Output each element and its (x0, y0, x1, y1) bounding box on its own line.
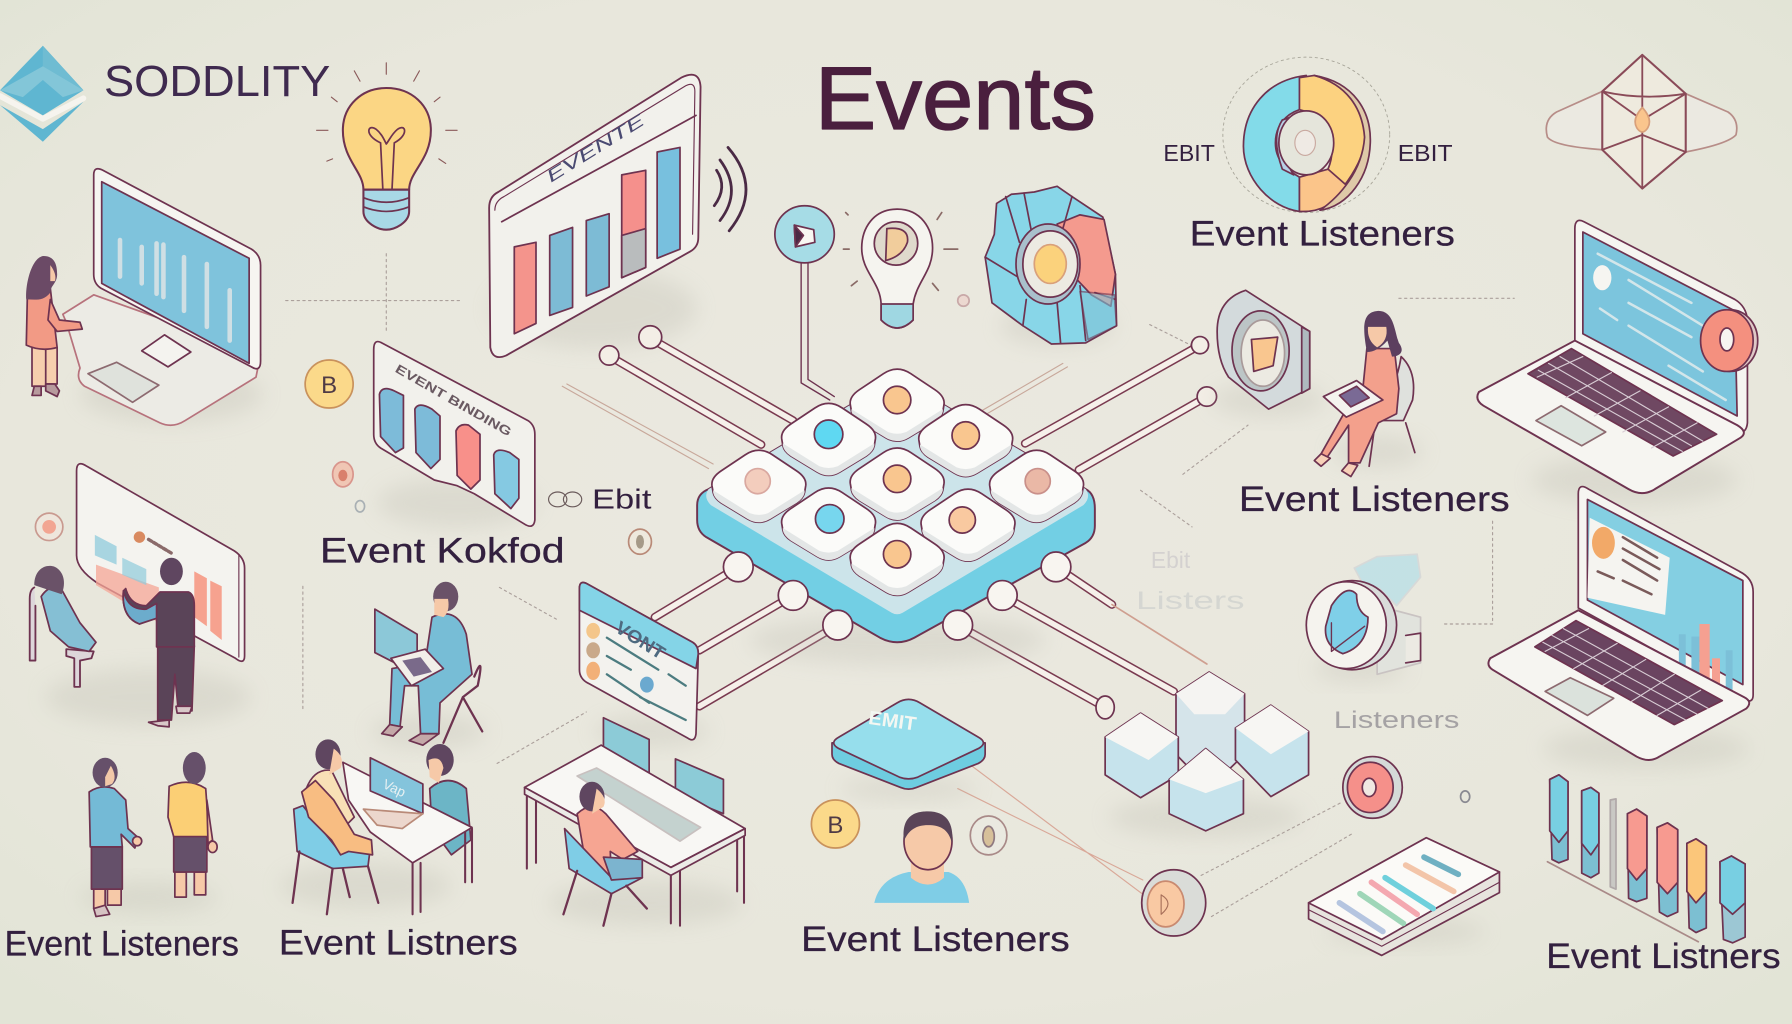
badge: B left (305, 360, 353, 408)
tablet (1323, 381, 1383, 417)
worker (563, 782, 647, 926)
shoes (382, 725, 439, 745)
icon: signal waves (714, 147, 746, 231)
small dot (958, 295, 969, 306)
laptop top right (1477, 220, 1758, 505)
donut chart (1223, 57, 1390, 213)
panel heading: EVENTE (542, 109, 649, 186)
window heading: VONT (612, 616, 669, 663)
label: Listeners: Listeners (1334, 707, 1459, 734)
label: Event Listeners bottom center: Event Listeners (801, 919, 1070, 959)
keyboard (1535, 621, 1722, 725)
small pink token (333, 462, 353, 487)
icon: segmented gear (985, 186, 1117, 346)
label: Event Listeners bottom left: Event Listeners (5, 923, 239, 963)
label: Event Listeners right: Event Listeners (1239, 479, 1510, 519)
keyboard (1528, 349, 1717, 456)
browser window card (579, 582, 709, 747)
panel: binding bar chart (374, 342, 537, 528)
desk with monitors and worker (525, 718, 745, 926)
pointed bar chart (1547, 775, 1745, 943)
screen bars (1679, 624, 1733, 696)
label: Event Listners: Event Listners (279, 922, 518, 962)
window content (586, 623, 654, 693)
ring listener icon (1306, 554, 1421, 682)
emit text: EMIT (867, 707, 918, 736)
cube front (1169, 749, 1243, 831)
panel bars (379, 389, 519, 509)
label: Ebit (549, 484, 652, 515)
trackpad (1536, 406, 1606, 446)
cube left (1105, 713, 1178, 798)
chair (441, 666, 482, 789)
stripes (1339, 857, 1458, 931)
pink ring token (1343, 757, 1402, 818)
chair (1366, 357, 1415, 466)
tiny token (1461, 791, 1470, 802)
tile: upper right (919, 405, 1013, 477)
monitor display with bars (102, 182, 249, 363)
icon: lightbulb (317, 63, 457, 230)
seated person (30, 566, 96, 687)
monitor: Vap (380, 777, 408, 800)
faint label: Ebit Listers: Listers (1136, 587, 1245, 615)
monitor stand (142, 335, 191, 367)
panel: Events bar chart (489, 75, 701, 357)
gear segment dividers (985, 193, 1115, 343)
tile: center (850, 448, 944, 520)
panel header text: EVENT BINDING (393, 362, 514, 439)
desk with two people (280, 739, 472, 914)
gear silhouette (985, 186, 1117, 344)
person in yellow (168, 752, 217, 897)
badge (1701, 310, 1758, 371)
pin with play icon (775, 206, 834, 400)
laptop base (391, 649, 443, 686)
monitor with woman (26, 169, 263, 425)
panel bars (514, 147, 680, 334)
faint label: Ebit Listers (1136, 547, 1245, 615)
whiteboard with two people (30, 464, 251, 727)
woman at monitor (26, 256, 82, 397)
monitor screen (94, 169, 261, 369)
document strip (577, 768, 701, 841)
icon: crystal wings (1546, 55, 1737, 189)
label: Event Listners bottom right: Event Listners (1546, 936, 1781, 976)
label: EBIT right: EBIT (1398, 140, 1453, 166)
cube back (1176, 672, 1245, 789)
label: EBIT left: EBIT (1163, 140, 1215, 166)
hub connector nodes (723, 552, 1071, 640)
tiles (712, 369, 1084, 595)
tile: top (850, 369, 944, 441)
person bust (874, 811, 969, 903)
dress and legs (1321, 349, 1399, 463)
laptop right lower (1488, 487, 1753, 769)
tile: bottom (850, 523, 944, 595)
table top (343, 762, 472, 863)
person head (34, 566, 64, 594)
laptop (375, 609, 417, 674)
hair (1364, 311, 1402, 357)
monitors (603, 718, 723, 814)
logo wordmark: SODDLITY (104, 58, 330, 106)
monitor trackpad (88, 362, 159, 402)
man body (390, 614, 472, 734)
central hub (697, 369, 1095, 665)
right person (426, 744, 471, 855)
bars (1550, 775, 1745, 943)
hub top plate (706, 377, 1088, 614)
seated man with laptop (371, 582, 486, 789)
faint dashed guide lines (286, 254, 1514, 917)
label: Event Listeners top: Event Listeners (1190, 214, 1455, 254)
label: Ebit: Ebit (592, 484, 652, 515)
standing presenter (123, 558, 194, 727)
trackpad (1545, 678, 1614, 715)
monitor (370, 758, 423, 814)
badge: B bottom: B (827, 812, 843, 839)
small faint token (355, 501, 365, 512)
faint label: Ebit Listers: Ebit (1151, 547, 1191, 573)
tile: upper left (782, 403, 876, 475)
screen content (1592, 527, 1659, 594)
chart axis (1547, 862, 1698, 942)
seated woman with tablet (1314, 311, 1423, 477)
gear red segment (1057, 215, 1115, 306)
tile: lower left (782, 488, 876, 560)
title: Events (815, 48, 1096, 148)
tile: far right (990, 450, 1084, 522)
whiteboard (77, 464, 245, 661)
front person and chair (293, 781, 378, 914)
emit button (832, 699, 985, 800)
person in blue (89, 758, 142, 917)
table legs (413, 829, 472, 914)
icon: white pin bulb (843, 209, 958, 328)
cubes (1105, 672, 1309, 838)
small token (629, 529, 651, 554)
logo: diamond mark (0, 46, 83, 142)
connector rods (562, 326, 1217, 719)
back person (306, 739, 354, 829)
pink marker circle (35, 513, 63, 541)
notebook with stripes (1309, 838, 1499, 955)
badge: B left: B (321, 372, 337, 399)
cube right (1235, 705, 1309, 797)
tile: lower right (921, 489, 1015, 561)
monitor base (63, 295, 261, 425)
paper on table (363, 809, 423, 829)
chair frame (30, 587, 94, 687)
tile: far left (712, 450, 806, 522)
peach ring token (1142, 870, 1206, 936)
label: Event Kokfod: Event Kokfod (320, 530, 565, 570)
hub body (697, 377, 1095, 642)
table (525, 745, 745, 926)
badge: B bottom (811, 800, 859, 848)
small token right of bust (970, 816, 1007, 855)
person torso (41, 587, 96, 651)
hexagonal listener icon (1211, 290, 1326, 417)
two standing people (80, 752, 217, 917)
